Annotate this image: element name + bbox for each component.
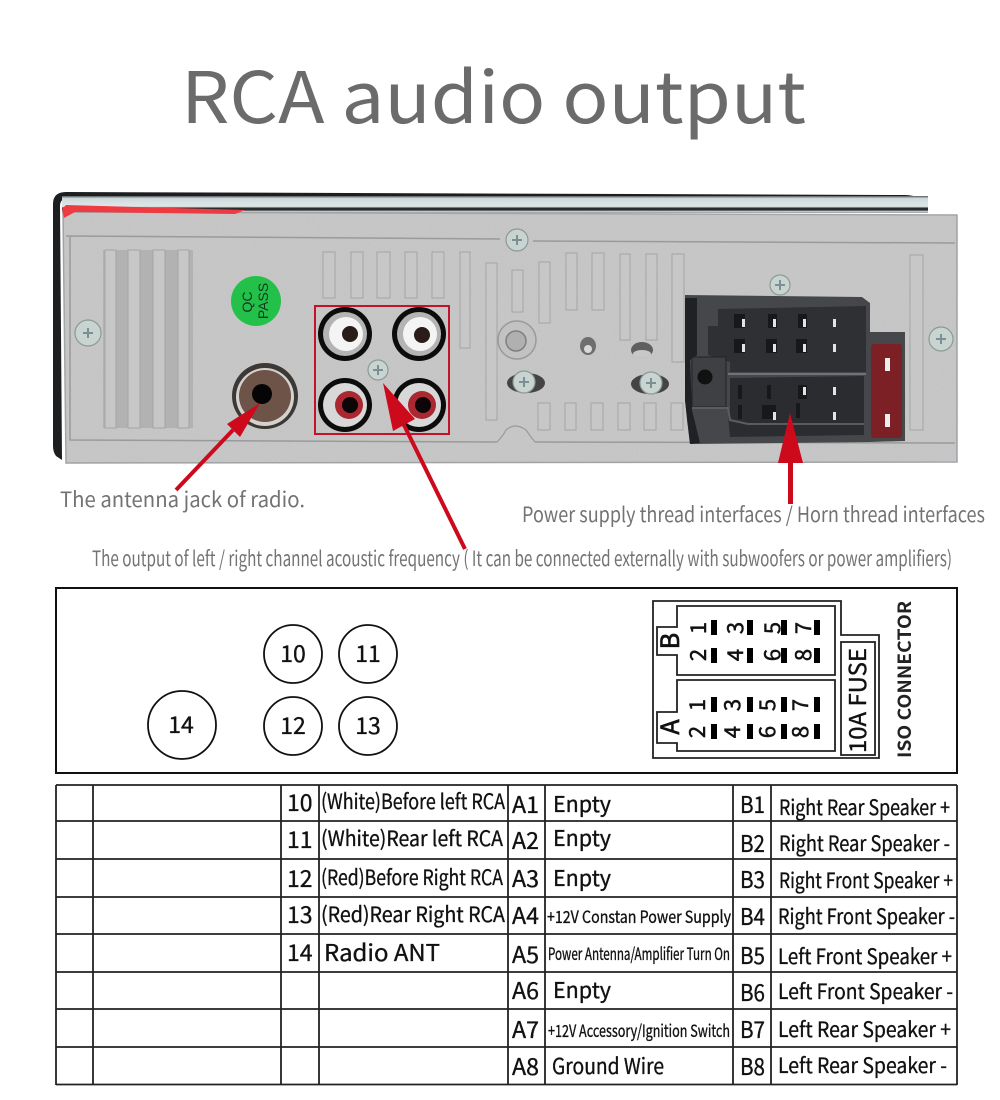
A pin labels: [512, 786, 539, 1082]
QC PASS sticker: QC: [239, 292, 255, 312]
B pin labels: [740, 786, 765, 1082]
B pin functions: Right Front Speaker -: [778, 901, 955, 931]
A pin functions: Enpty: [553, 861, 612, 893]
A pin labels: A3: [512, 860, 539, 894]
ribs left: [103, 250, 193, 428]
numbers column: 12: [287, 860, 313, 894]
A pin functions: Enpty: [553, 787, 612, 819]
washer and holes: [498, 321, 669, 394]
device rear panel photo: [53, 192, 957, 549]
pin numbers B: 8: [786, 649, 818, 661]
red fuse: [871, 344, 902, 438]
pin circle 11: [339, 625, 397, 683]
chrome strip: [62, 196, 928, 213]
RCA jacks: [318, 307, 446, 432]
A pin labels: A1: [512, 786, 539, 820]
pins B: [711, 620, 820, 663]
pin numbers B: 7: [786, 622, 818, 634]
B pin functions: Right Rear Speaker -: [779, 828, 950, 858]
A pin labels: A4: [512, 897, 539, 931]
screws: [75, 229, 953, 394]
RCA descriptions: (Red)Before Right RCA: [321, 862, 503, 892]
arrow: antenna: [176, 403, 260, 490]
pin numbers B: 6: [755, 649, 787, 661]
bottom notch: [497, 426, 535, 442]
arrow: RCA output: [383, 383, 465, 549]
label A: A: [651, 719, 687, 735]
antenna jack: [232, 363, 298, 429]
pin numbers A: 1: [680, 699, 712, 711]
B pin labels: B2: [740, 825, 765, 859]
QC PASS sticker: PASS: [255, 283, 271, 319]
pin numbers A: 4: [715, 726, 747, 738]
pin circle 10: [264, 625, 322, 683]
RCA descriptions: Radio ANT: [324, 934, 440, 968]
label ISO connector: ISO CONNECTOR: [891, 601, 917, 758]
vents: [323, 252, 923, 430]
pin numbers A: 5: [750, 699, 782, 711]
pin circle 14: [148, 691, 216, 759]
pin numbers A: 3: [715, 699, 747, 711]
title: RCA audio output: [181, 42, 806, 144]
B pin labels: B4: [740, 898, 765, 932]
A pin functions: [547, 787, 731, 1081]
A pin labels: A6: [512, 972, 539, 1006]
numbers column: [287, 784, 313, 968]
pin numbers B: [681, 622, 818, 661]
B pin labels: B3: [740, 861, 765, 895]
QC PASS sticker: [231, 276, 281, 326]
ISO connector diagram: [651, 601, 917, 758]
pin numbers A: 8: [783, 726, 815, 738]
pin numbers B: 1: [681, 622, 713, 634]
A pin labels: A8: [512, 1048, 539, 1082]
pin circle 10: 10: [280, 635, 306, 669]
label B: B: [651, 633, 687, 649]
B pin functions: [778, 792, 955, 1080]
numbers column: 13: [287, 896, 313, 930]
pin circle 11: 11: [355, 635, 381, 669]
metal panel: [63, 212, 957, 463]
A pin functions: Power Antenna/Amplifier Turn On: [548, 940, 730, 965]
caption: antenna: The antenna jack of radio.: [60, 484, 305, 514]
RCA descriptions: [321, 786, 505, 968]
A pin functions: Enpty: [553, 821, 612, 853]
pin circle 13: [339, 697, 397, 755]
RCA descriptions: (White)Rear left RCA: [321, 823, 503, 853]
B pin labels: B6: [740, 974, 765, 1008]
pin numbers B: 4: [718, 649, 750, 661]
B pin functions: Left Rear Speaker +: [778, 1014, 951, 1044]
pin circle 13: 13: [355, 707, 381, 741]
pin circle 12: [264, 697, 322, 755]
B pin labels: B1: [740, 786, 765, 820]
pin circle 12: 12: [280, 707, 306, 741]
RCA descriptions: (White)Before left RCA: [321, 786, 505, 816]
RCA descriptions: (Red)Rear Right RCA: [321, 899, 505, 929]
B pin labels: B7: [740, 1011, 765, 1045]
pins A: [711, 697, 820, 739]
A pin labels: A7: [512, 1011, 539, 1045]
black bracket: [53, 192, 928, 460]
A pin labels: A2: [512, 822, 539, 856]
red film strip: [62, 205, 245, 218]
numbers column: 10: [287, 784, 313, 818]
A pin labels: A5: [512, 936, 539, 970]
B pin functions: Right Front Speaker +: [779, 865, 953, 895]
B pin functions: Left Front Speaker +: [778, 941, 952, 971]
label 10A fuse: 10A FUSE: [839, 648, 873, 753]
A pin functions: Ground Wire: [552, 1049, 664, 1081]
pin numbers B: 2: [681, 649, 713, 661]
A pin functions: Enpty: [553, 973, 612, 1005]
A pin functions: +12V Constan Power Supply: [547, 903, 731, 928]
pin numbers B: 3: [718, 622, 750, 634]
B pin labels: B8: [740, 1048, 765, 1082]
pin numbers A: 7: [783, 699, 815, 711]
table grid: [56, 785, 957, 1085]
numbers column: 11: [287, 821, 313, 855]
pin numbers A: 6: [750, 726, 782, 738]
pin numbers B: 5: [755, 622, 787, 634]
connector diagram panel: [56, 588, 957, 773]
numbers column: 14: [287, 934, 313, 968]
pin circle 14: 14: [168, 706, 194, 740]
A pin functions: +12V Accessory/Ignition Switch: [548, 1017, 730, 1042]
B pin functions: Left Rear Speaker -: [778, 1050, 947, 1080]
pin numbers A: 2: [680, 726, 712, 738]
arrow: ISO connector: [778, 413, 803, 504]
ISO connector block: [685, 295, 905, 444]
B pin labels: B5: [740, 937, 765, 971]
B pin functions: Left Front Speaker -: [778, 976, 953, 1006]
RCA highlight frame: [315, 306, 449, 434]
pin numbers A: [680, 699, 815, 738]
wiring table: [56, 784, 957, 1085]
B pin functions: Right Rear Speaker +: [779, 792, 950, 822]
